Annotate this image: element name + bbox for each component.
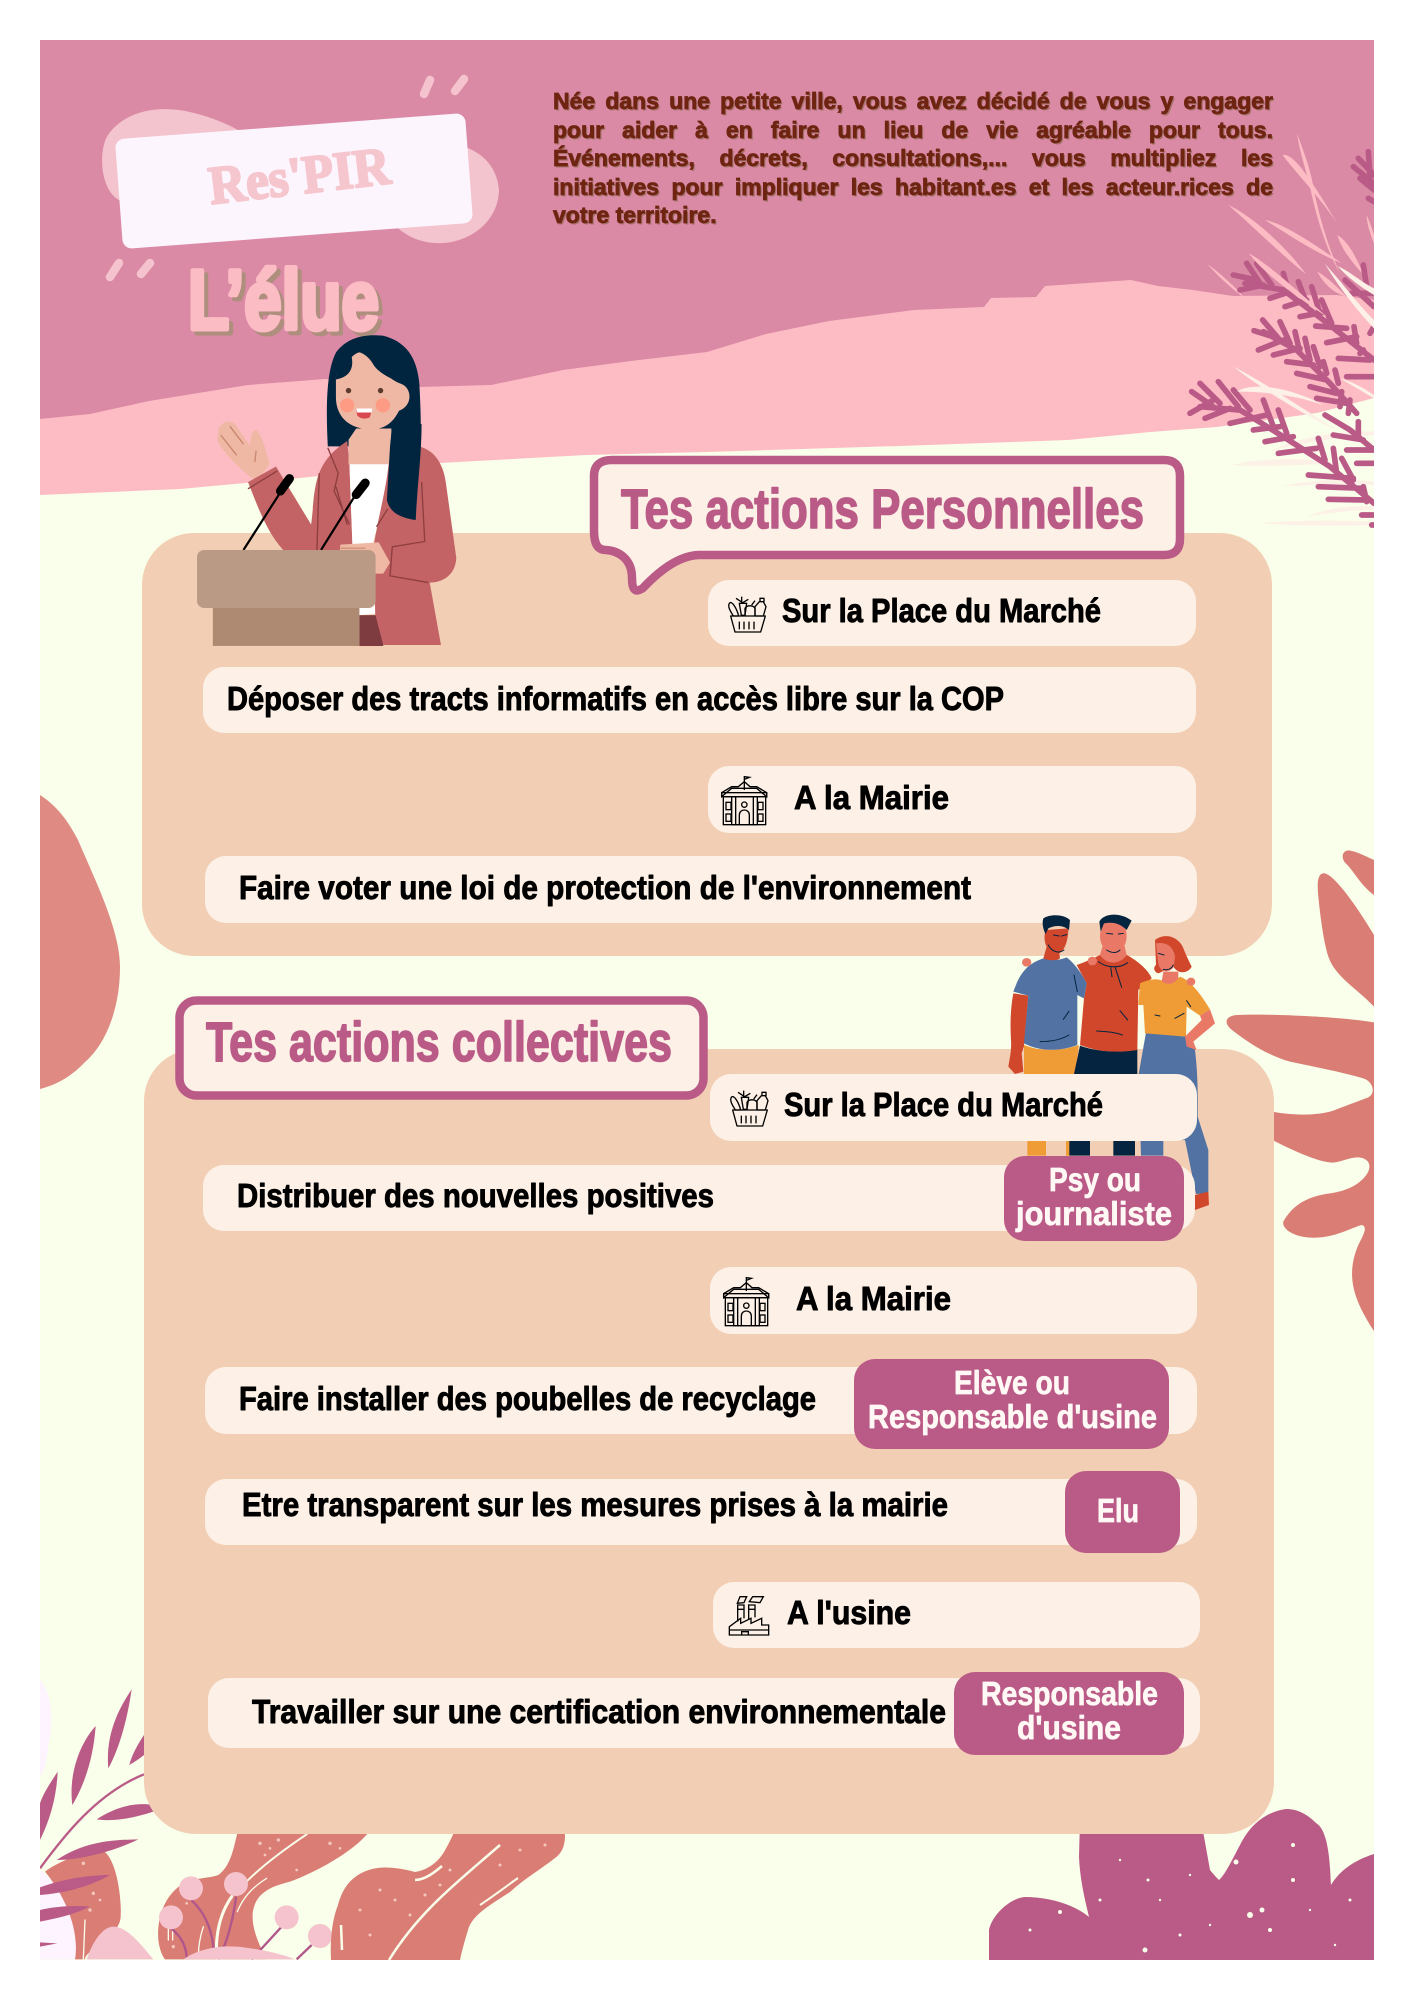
icon: town hall: [724, 1278, 769, 1326]
row: Sur la Place du Marché (collective): [710, 1074, 1197, 1141]
heading box: Tes actions collectives: Tes actions collectives: [206, 1010, 672, 1073]
intro text block: initiatives pour impliquer les habitant.es et les acteur.rices de: [553, 174, 1273, 200]
row: Sur la Place du Marché (collective): Sur la Place du Marché: [784, 1086, 1103, 1123]
row: Travailler sur une certification: Travailler sur une certification environnementale: [252, 1693, 946, 1730]
page background: [40, 398, 1374, 1960]
row: Travailler sur une certification: [208, 1678, 1200, 1748]
role pill: Psy ou journaliste: journaliste: [1015, 1195, 1172, 1232]
speech bubble: Tes actions Personnelles: Tes actions Personnelles: [621, 477, 1144, 540]
icon: market basket: [729, 597, 766, 632]
illustration: group of three people: [1008, 915, 1215, 1210]
intro text block: [552, 88, 1274, 228]
plant top right: [1190, 134, 1374, 526]
dark pink header band: [40, 40, 1374, 419]
man 1 shirt: [1013, 957, 1087, 1050]
row: A l'usine: A l'usine: [787, 1594, 911, 1631]
row: Sur la Place du Marché (personal): [708, 580, 1196, 646]
row: Sur la Place du Marché (personal): Sur la Place du Marché: [782, 592, 1101, 629]
role pill: Elève ou Responsable d'usine: Responsable d'usine: [868, 1398, 1157, 1435]
row: Faire voter une loi: [205, 856, 1197, 923]
man 1 skin: [1008, 993, 1028, 1074]
role pill: Elu: Elu: [1097, 1492, 1139, 1529]
Res'PIR blob background: [102, 109, 499, 243]
row: Déposer des tracts: Déposer des tracts informatifs en accès libre sur la COP: [227, 680, 1004, 717]
role pill: Psy ou journaliste: [1004, 1156, 1184, 1241]
intro text block: Née dans une petite ville, vous avez décidé de vous y engager: [553, 88, 1273, 114]
purple flower bottom right: [989, 1809, 1374, 1960]
role pill: Elève ou Responsable d'usine: Elève ou: [954, 1364, 1070, 1401]
row: Faire installer des poubelles: [205, 1367, 1197, 1434]
row: Distribuer des nouvelles positives: Distribuer des nouvelles positives: [237, 1177, 714, 1214]
man 1 shorts: [1024, 1045, 1079, 1074]
heading: L'élue: L’élue: [192, 257, 383, 351]
man 2 shirt: [1077, 955, 1152, 1052]
icon: factory: [729, 1597, 769, 1635]
woman hair and top: [1154, 936, 1192, 973]
heading box: Tes actions collectives: [180, 1000, 704, 1096]
man 2 pants: [1074, 1046, 1137, 1074]
row: A la Mairie (collective): [710, 1267, 1197, 1334]
row: A la Mairie (personal): A la Mairie: [794, 779, 949, 816]
row: A la Mairie (personal): [708, 766, 1196, 833]
plant bottom left: [40, 1680, 367, 1959]
row: Etre transparent: [205, 1479, 1197, 1545]
intro text block: Événements, décrets, consultations,... vous multipliez les: [553, 145, 1273, 171]
role pill: Responsable d'usine: [954, 1672, 1184, 1755]
row: Faire installer des poubelles: Faire installer des poubelles de recyclage: [239, 1380, 816, 1417]
hands and line details: [1022, 957, 1195, 986]
role pill: Responsable d'usine: d'usine: [1017, 1709, 1121, 1746]
decorative salmon leaf right: [1227, 850, 1374, 1331]
light pink torn band: [40, 260, 1374, 495]
decorative ticks: [110, 79, 464, 277]
row: Déposer des tracts: [203, 667, 1196, 733]
woman jeans and shoe: [1139, 1033, 1208, 1194]
row: A la Mairie (collective): A la Mairie: [796, 1280, 951, 1317]
role pill: Elu: [1065, 1471, 1180, 1553]
illustration: elected woman at podium: [197, 335, 456, 646]
panel: personal actions background: [142, 533, 1272, 956]
Res'PIR logo text: Res'PIR: [205, 135, 394, 216]
icon: town hall: [722, 777, 767, 825]
Res'PIR card: [115, 113, 473, 249]
intro text block: votre territoire.: [553, 202, 717, 228]
row: Etre transparent: Etre transparent sur les mesures prises à la mairie: [242, 1486, 948, 1523]
heading: L'élue: L’élue: [188, 253, 379, 347]
row: A l'usine: [713, 1582, 1200, 1648]
speech bubble: Tes actions Personnelles: [594, 460, 1180, 590]
role pill: Elève ou Responsable d'usine: [854, 1359, 1169, 1449]
intro text block: pour aider à en faire un lieu de vie agréable pour tous.: [553, 116, 1273, 142]
panel: collective actions background: [144, 1049, 1274, 1834]
icon: market basket: [731, 1091, 768, 1126]
row: Faire voter une loi: Faire voter une loi de protection de l'environnement: [239, 869, 971, 906]
role pill: Responsable d'usine: Responsable: [981, 1675, 1158, 1712]
decorative salmon blob left: [40, 795, 120, 1089]
row: Distribuer des nouvelles positives: [203, 1165, 1195, 1231]
salmon leaf bottom centre: [331, 1820, 565, 1960]
role pill: Psy ou journaliste: Psy ou: [1049, 1161, 1141, 1198]
